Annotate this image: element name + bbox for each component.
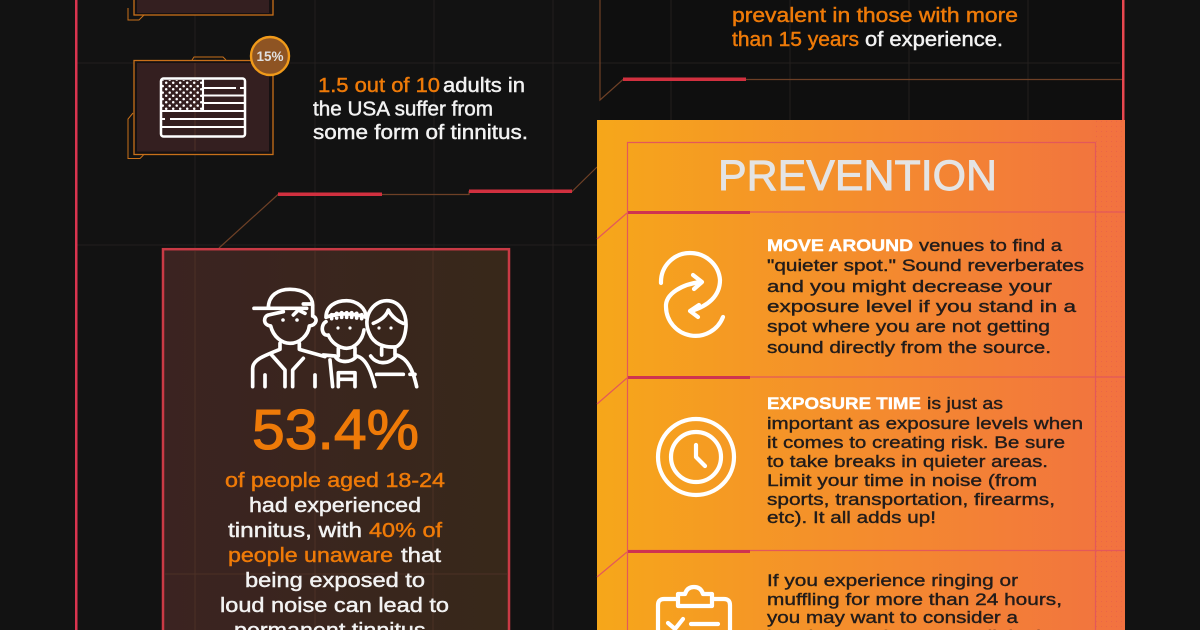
- text: exposure time: is just as: [927, 395, 1003, 413]
- left frame line: [75, 0, 78, 630]
- big number: 53.4%: [252, 398, 419, 462]
- text: exposure time: [767, 395, 1083, 527]
- text: move around: MOVE AROUND: [767, 237, 913, 255]
- text: see a professional: you may want to consider a: [767, 609, 1019, 627]
- badge: 15%: [251, 37, 289, 75]
- text: see a professional: [767, 572, 1062, 630]
- icon: rotating arrows: [661, 253, 723, 336]
- text: young adults statistic: had experienced: [249, 495, 421, 517]
- text: exposure time: sports, transportation, firearms,: [767, 491, 1055, 509]
- text: exposure time: it comes to creating risk. Be sure: [767, 434, 1065, 452]
- text: young adults statistic: 40% of: [369, 520, 443, 542]
- text: young adults statistic: [220, 470, 449, 630]
- icon: flag: [161, 78, 245, 136]
- right frame line: [1122, 0, 1124, 120]
- text: USA statistic: the USA suffer from: [313, 98, 493, 120]
- text: move around: "quieter spot." Sound reverberates: [767, 257, 1084, 275]
- text: experience statistic: [732, 5, 1018, 51]
- text: experience statistic: prevalent in those with more: [732, 5, 1018, 27]
- text: young adults statistic: that: [401, 545, 442, 567]
- text: experience statistic: of experience.: [865, 29, 1003, 51]
- text: USA statistic: some form of tinnitus.: [313, 122, 528, 144]
- heading: PREVENTION: [718, 152, 997, 200]
- text: move around: exposure level if you stand in a: [767, 298, 1077, 316]
- panel: prevention: [597, 120, 1125, 630]
- panel: 53.4% young adults: [163, 249, 509, 630]
- icon card: USA flag: [128, 37, 289, 158]
- circuit connector lines: [219, 0, 1122, 248]
- text: exposure time: EXPOSURE TIME: [767, 395, 921, 413]
- icon: clipboard: [658, 587, 730, 630]
- text: young adults statistic: being exposed to: [245, 570, 425, 592]
- text: young adults statistic: tinnitus, with: [228, 520, 362, 542]
- icon: three young people: [253, 289, 417, 387]
- icon: clock: [658, 419, 734, 495]
- text: see a professional: muffling for more than 24 hours,: [767, 591, 1062, 609]
- text: exposure time: important as exposure levels when: [767, 415, 1083, 433]
- top icon card: [128, 0, 273, 20]
- text: move around: sound directly from the source.: [767, 339, 1051, 357]
- text: exposure time: etc). It all adds up!: [767, 509, 936, 527]
- text: move around: spot where you are not getting: [767, 318, 1050, 336]
- text: USA statistic: [313, 75, 528, 144]
- text: exposure time: to take breaks in quieter areas.: [767, 453, 1048, 471]
- text: young adults statistic: of people aged 18-24: [225, 470, 445, 492]
- text: move around: [767, 237, 1084, 357]
- text: see a professional: If you experience ringing or: [767, 572, 1019, 590]
- text: young adults statistic: loud noise can lead to: [220, 595, 449, 617]
- text: experience statistic: than 15 years: [732, 29, 859, 51]
- text: young adults statistic: people unaware: [228, 545, 393, 567]
- text: USA statistic: adults in: [443, 75, 525, 97]
- text: USA statistic: 1.5 out of 10: [318, 75, 440, 97]
- text: move around: and you might decrease your: [767, 278, 1053, 296]
- text: exposure time: Limit your time in noise (from: [767, 472, 1037, 490]
- badge: 15%: 15%: [256, 49, 284, 64]
- text: move around: venues to find a: [919, 237, 1063, 255]
